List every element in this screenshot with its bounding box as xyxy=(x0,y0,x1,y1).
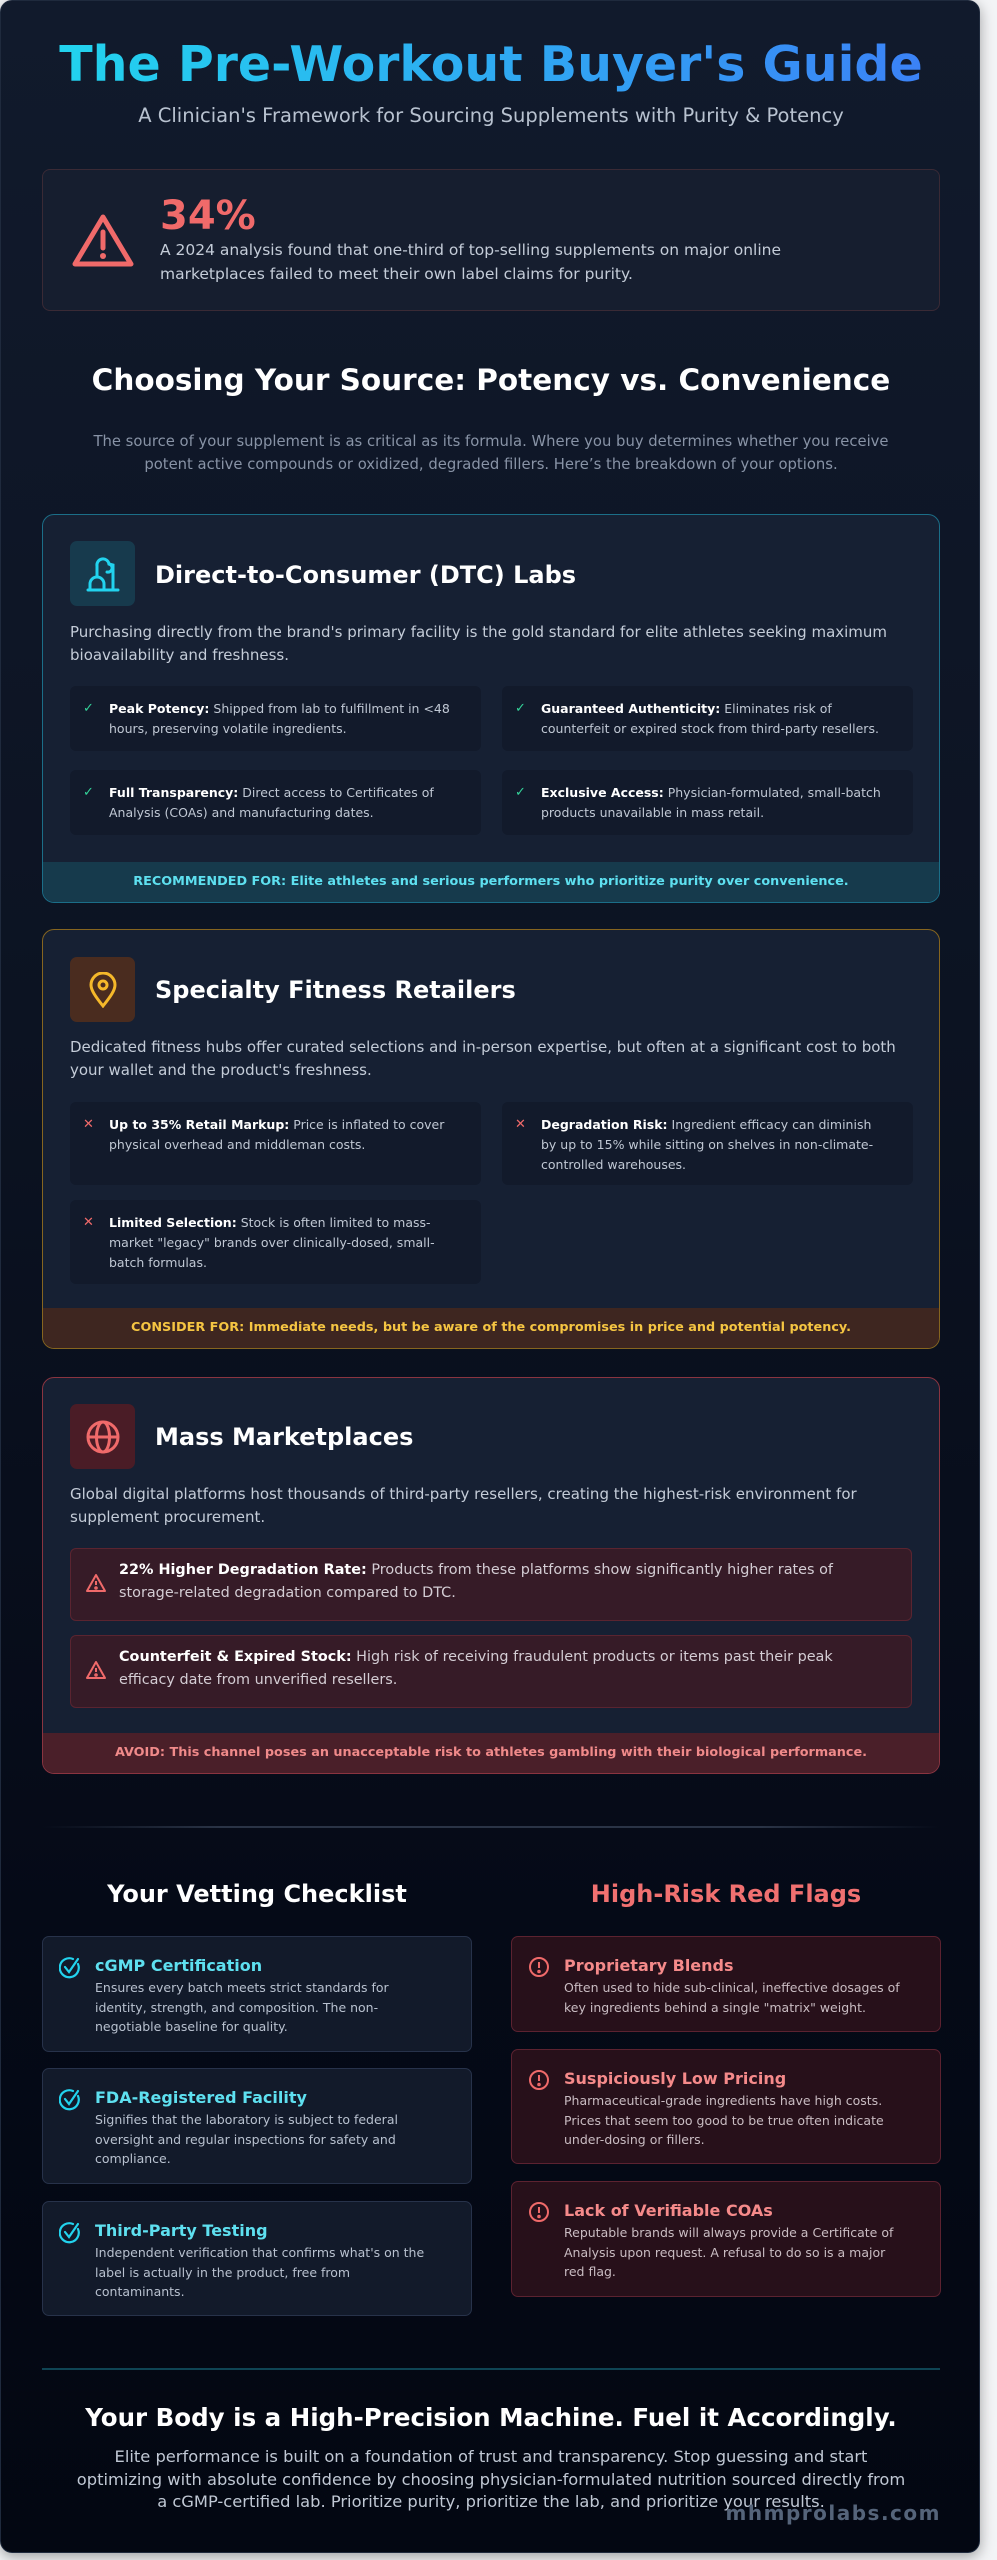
consider band: CONSIDER FOR: Immediate needs, but be aware of the compromises in price and potential potency. xyxy=(131,1320,851,1335)
icon: warning triangle xyxy=(72,214,134,266)
benefit: exclusive access: Exclusive Access: Physician-formulated, small-batch products unavailable in mass retail. xyxy=(541,785,881,820)
drawback: limited selection xyxy=(70,1200,481,1284)
benefit: transparency xyxy=(70,770,481,835)
checklist: FDA: FDA-Registered Facility xyxy=(95,2088,307,2107)
red flag: proprietary blends: Proprietary Blends xyxy=(564,1956,734,1975)
drawback: degradation: by up to 15% while sitting on shelves in non-climate- xyxy=(541,1137,873,1152)
red flag: COAs: Analysis upon request. A refusal to do so is a major xyxy=(564,2245,885,2260)
warning: degradation rate: 22% Higher Degradation Rate: Products from these platforms show significantly higher rates of storage-related degradation compared to DTC. xyxy=(119,1562,833,1601)
checklist: third-party: Independent verification that confirms what's on the label is actually in the product, free from contaminants. xyxy=(95,2245,424,2299)
drawback: markup: Up to 35% Retail Markup: Price is inflated to cover physical overhead and middleman costs. xyxy=(109,1117,444,1152)
benefit: transparency: Full Transparency: Direct access to Certificates of Analysis (COAs) and manufacturing dates. xyxy=(109,785,434,820)
footer text: a cGMP-certified lab. Prioritize purity, prioritize the lab, and prioritize your results. xyxy=(157,2492,825,2511)
description: Global digital platforms host thousands of third-party resellers, creating the highest-risk environment for supplement procurement. xyxy=(70,1485,857,1526)
checklist: third-party: Third-Party Testing xyxy=(95,2221,268,2240)
panel: specialty retailers xyxy=(42,929,940,1349)
red flag: COAs xyxy=(511,2181,941,2297)
drawback: limited selection: ✕ xyxy=(83,1215,94,1230)
avoid band: AVOID: This channel poses an unacceptable risk to athletes gambling with their biological performance. xyxy=(115,1745,867,1760)
red flag: low pricing: Pharmaceutical-grade ingredients have high costs. xyxy=(564,2093,882,2108)
checklist: third-party xyxy=(42,2201,472,2316)
panel: DTC labs xyxy=(42,514,940,903)
drawback: limited selection: Limited Selection: Stock is often limited to mass-market "legacy" brands over clinically-dosed, small-batch formulas. xyxy=(109,1215,435,1270)
drawback: degradation: ✕ xyxy=(515,1117,526,1132)
stat callout: 34% xyxy=(42,169,940,311)
red flag: low pricing xyxy=(511,2049,941,2164)
icon: globe xyxy=(70,1404,135,1469)
stat text: A 2024 analysis found that one-third of top-selling supplements on major online marketplaces failed to meet their own label claims for purity. xyxy=(160,241,781,282)
benefit: peak potency: Peak Potency: Shipped from lab to fulfillment in <48 hours, preserving volatile ingredients. xyxy=(109,701,450,736)
checklist: cGMP: Ensures every batch meets strict standards for identity, strength, and composition. The non-negotiable baseline for quality. xyxy=(95,1980,389,2034)
stat number: 34% xyxy=(160,193,256,239)
footer text xyxy=(77,2447,905,2511)
red flag: proprietary blends: Often used to hide sub-clinical, ineffective dosages of key ingredients behind a single "matrix" weight. xyxy=(564,1980,900,2015)
warning: degradation rate xyxy=(70,1548,912,1621)
footer text: Elite performance is built on a foundation of trust and transparency. Stop guessing and start xyxy=(115,2447,867,2466)
description: Dedicated fitness hubs offer curated selections and in-person expertise, but often at a significant cost to both your wallet and the product's freshness. xyxy=(70,1038,896,1078)
red flag: COAs: Reputable brands will always provide a Certificate of xyxy=(564,2225,893,2240)
heading: vetting checklist: Your Vetting Checklist xyxy=(107,1880,407,1908)
red flag: proprietary blends xyxy=(511,1936,941,2032)
title: The Pre-Workout Buyer's Guide xyxy=(59,36,923,93)
footer text: optimizing with absolute confidence by choosing physician-formulated nutrition sourced directly from xyxy=(77,2470,905,2488)
red flag: low pricing: Prices that seem too good to be true often indicate under-dosing or fillers. xyxy=(564,2113,884,2147)
drawback: markup: ✕ xyxy=(83,1117,94,1132)
drawback: degradation: Degradation Risk: Ingredient efficacy can diminish xyxy=(541,1117,871,1132)
panel title: Mass Marketplaces xyxy=(155,1423,413,1451)
footer heading: Your Body is a High-Precision Machine. Fuel it Accordingly. xyxy=(85,2403,897,2432)
checklist: cGMP xyxy=(42,1936,472,2052)
benefit: exclusive access: ✓ xyxy=(515,785,526,800)
benefit: exclusive access xyxy=(502,770,913,835)
icon: flask xyxy=(70,541,135,606)
red flag: low pricing: Suspiciously Low Pricing xyxy=(564,2069,786,2088)
intro text: The source of your supplement is as critical as its formula. Where you buy determines whether you receive potent active compounds or oxidized, degraded fillers. Here’s the breakdown of your options. xyxy=(93,433,889,473)
subtitle: A Clinician's Framework for Sourcing Supplements with Purity & Potency xyxy=(138,104,844,127)
panel title: Direct-to-Consumer (DTC) Labs xyxy=(155,561,576,589)
drawback: degradation: controlled warehouses. xyxy=(541,1157,686,1172)
drawback: degradation xyxy=(502,1102,913,1185)
warning: counterfeit: Counterfeit & Expired Stock: High risk of receiving fraudulent products or items past their peak efficacy date from unverified resellers. xyxy=(119,1649,833,1688)
benefit: authenticity xyxy=(502,686,913,751)
benefit: authenticity: ✓ xyxy=(515,701,526,716)
consider band xyxy=(43,1308,939,1348)
description: Purchasing directly from the brand's primary facility is the gold standard for elite athletes seeking maximum bioavailability and freshness. xyxy=(70,623,887,664)
icon: map pin xyxy=(70,957,135,1022)
red flag: COAs: Lack of Verifiable COAs xyxy=(564,2201,773,2220)
checklist: cGMP: cGMP Certification xyxy=(95,1956,262,1975)
benefit: authenticity: Guaranteed Authenticity: Eliminates risk of counterfeit or expired stock from third-party resellers. xyxy=(541,701,879,736)
red flag: COAs: red flag. xyxy=(564,2264,616,2279)
benefit: peak potency: ✓ xyxy=(83,701,94,716)
benefit: peak potency xyxy=(70,686,481,751)
checklist: FDA xyxy=(42,2068,472,2184)
drawback: markup xyxy=(70,1102,481,1185)
avoid band xyxy=(43,1733,939,1773)
recommendation band: RECOMMENDED FOR: Elite athletes and serious performers who prioritize purity over convenience. xyxy=(133,874,849,889)
panel: mass marketplaces xyxy=(42,1377,940,1774)
panel title: Specialty Fitness Retailers xyxy=(155,976,516,1004)
heading: red flags: High-Risk Red Flags xyxy=(591,1880,861,1908)
checklist: FDA: Signifies that the laboratory is subject to federal oversight and regular inspections for safety and compliance. xyxy=(95,2112,398,2166)
watermark: mhmprolabs.com xyxy=(726,2501,941,2525)
warning: counterfeit xyxy=(70,1635,912,1708)
section heading: Choosing Your Source: Potency vs. Convenience xyxy=(92,363,890,397)
recommendation band xyxy=(43,862,939,902)
benefit: transparency: ✓ xyxy=(83,785,94,800)
